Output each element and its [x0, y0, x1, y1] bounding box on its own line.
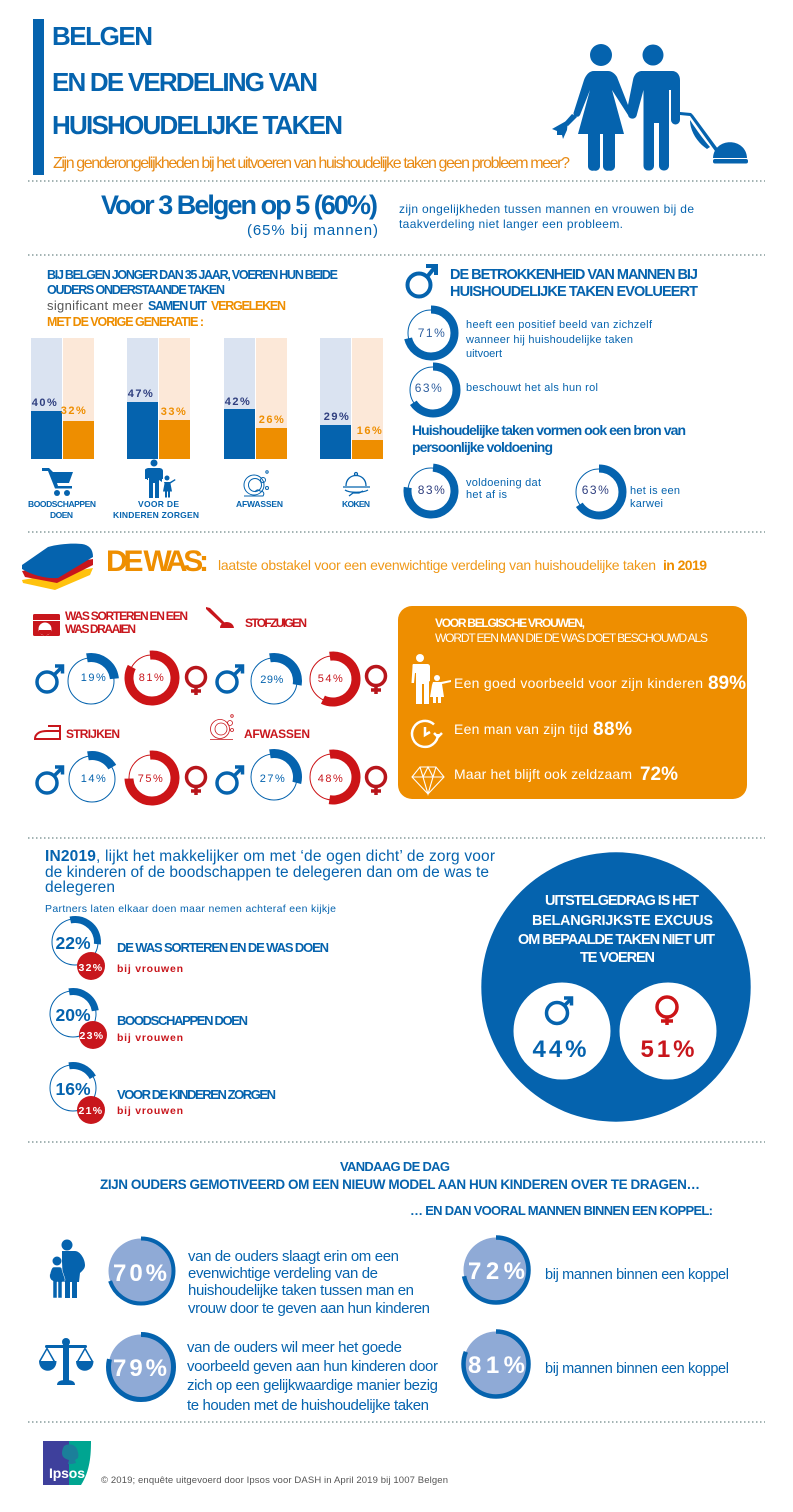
panel heading: WORDT EEN MAN DIE DE WAS DOET BESCHOUWD ALS: [435, 631, 708, 645]
bar labels: AFWASSEN: [236, 499, 283, 509]
stat: zeldzaam: Maar het blijft ook zeldzaam: [454, 766, 632, 782]
heading: vandaag de dag: [100, 1159, 713, 1218]
heading: voldoening: persoonlijke voldoening: [412, 439, 553, 455]
text: karwei: [630, 485, 680, 510]
heading: de was: [106, 545, 707, 578]
label: was sorteren: [65, 609, 188, 636]
stat: man van zijn tijd: [454, 719, 632, 740]
icon: clock: [412, 721, 442, 747]
ring male 19%: [64, 654, 118, 708]
ring 83%: 83%: [418, 483, 446, 497]
text: goede voorbeeld: te houden met de huishoudelijke taken: [187, 1397, 429, 1414]
label: was sorteren: WAS DRAAIEN: [65, 622, 136, 636]
logo: Ipsos: [43, 1441, 91, 1485]
heading: de was: laatste obstakel voor een evenwichtige verdeling van huishoudelijke taken: [218, 557, 656, 573]
donuts: was sorteren: [37, 653, 206, 708]
text: karwei: karwei: [630, 498, 663, 510]
headline: 3 Belgen op 5: [101, 190, 378, 239]
icon: couple with duster and vacuum: [552, 44, 748, 171]
ring: kinderen 16%: 21%: [79, 1105, 103, 1117]
label: stofzuigen: STOFZUIGEN: [245, 616, 307, 630]
bars: boodschappen: [31, 338, 94, 459]
headline explanation: [399, 202, 694, 231]
panel: Belgische vrouwen: [398, 606, 747, 799]
bar labels: DOEN: [50, 510, 73, 520]
bar labels: [28, 499, 370, 520]
bar labels: BOODSCHAPPEN: [28, 499, 96, 509]
panel text: BELANGRIJKSTE EXCUUS: [532, 913, 713, 929]
label: boodschappen: bij vrouwen: [117, 1032, 183, 1044]
ring 72%: 72%: [468, 1258, 525, 1285]
text: mannen koppel 1: bij mannen binnen een koppel: [545, 1267, 729, 1283]
bars: koken: 16%: [357, 425, 383, 437]
headline: 3 Belgen op 5: (65% bij mannen): [247, 222, 378, 239]
logo: Ipsos: Ipsos: [49, 1465, 85, 1481]
title block: EN DE VERDELING VAN: [52, 67, 318, 97]
male icon: [37, 767, 62, 793]
text: positief beeld: heeft een positief beeld van zichzelf: [466, 319, 653, 331]
stat: goed voorbeeld: Een goed voorbeeld voor zijn kinderen: [454, 675, 703, 691]
heading: voldoening: [412, 422, 686, 455]
panel text: [518, 893, 715, 966]
headline: 3 Belgen op 5: Voor 3 Belgen op 5 (60%): [101, 190, 378, 220]
donuts: strijken: [37, 752, 206, 806]
title block: BELGEN: [52, 21, 153, 51]
ring male 29%: 29%: [260, 674, 284, 686]
ring male 27%: 27%: [260, 773, 286, 785]
ring: was doen 22%: 32%: [79, 962, 103, 974]
icon: dishes red: [210, 715, 234, 740]
heading: jonger dan 35 jaar: BIJ BELGEN JONGER DAN 35 JAAR, VOEREN HUN BEIDE: [47, 268, 338, 282]
panel text: OM BEPAALDE TAKEN NIET UIT: [518, 932, 715, 948]
icon: stack of laundry: [22, 544, 93, 590]
headline explanation: zijn ongelijkheden tussen mannen en vrouwen bij de: [399, 202, 694, 216]
heading: de was: in 2019: [663, 557, 707, 573]
text: evenwichtige verdeling: huishoudelijke taken tussen man en: [188, 1282, 414, 1299]
ring male 14%: [65, 752, 119, 806]
female icon: [366, 666, 386, 694]
heading: betrokkenheid: HUISHOUDELIJKE TAKEN EVOLUEERT: [450, 284, 698, 300]
bars: kinderen: [127, 338, 190, 459]
panel heading: [435, 616, 708, 645]
text: evenwichtige verdeling: evenwichtige verdeling van de: [188, 1265, 378, 1282]
icon: iron: [35, 726, 60, 739]
heading: jonger dan 35 jaar: significant meer: [47, 298, 144, 313]
bar labels: KOKEN: [342, 499, 370, 509]
bar labels: KINDEREN ZORGEN: [113, 510, 199, 520]
heading: jonger dan 35 jaar: MET DE VORIGE GENERATIE :: [47, 315, 204, 329]
icon: cloche: [343, 472, 370, 496]
ring female 54%: [307, 653, 359, 705]
heading: betrokkenheid: DE BETROKKENHEID VAN MANNEN BIJ: [450, 267, 698, 283]
footer credit: © 2019; enquête uitgevoerd door Ipsos voor DASH in April 2019 bij 1007 Belgen: [101, 1475, 448, 1486]
stat: zeldzaam: 72%: [640, 764, 678, 785]
label: was doen: bij vrouwen: [117, 963, 183, 975]
stat: goed voorbeeld: [454, 673, 746, 694]
bars: afwassen: 42%: [225, 396, 251, 408]
text: evenwichtige verdeling: [188, 1248, 430, 1317]
male stat 44%: 44%: [532, 1036, 590, 1063]
text: goede voorbeeld: voorbeeld geven aan hun kinderen door: [187, 1358, 438, 1375]
heading: jonger dan 35 jaar: OUDERS ONDERSTAANDE TAKEN: [47, 283, 225, 297]
bar labels: VOOR DE: [138, 499, 179, 509]
ring female 48%: 48%: [318, 773, 344, 785]
label: kinderen: bij vrouwen: [117, 1105, 183, 1117]
ring 72%: [464, 1238, 528, 1302]
bar chart: generations: [31, 338, 383, 459]
text: positief beeld: uitvoert: [466, 348, 502, 360]
male icon: [37, 666, 62, 692]
icon: family: [50, 1240, 85, 1298]
label: was doen: DE WAS SORTEREN EN DE WAS DOEN: [117, 940, 329, 955]
ring female 54%: 54%: [318, 673, 344, 685]
text: in 2019 delegeren: IN2019, lijkt het makkelijker om met ‘de ogen dicht’ de zorg voor: [45, 848, 495, 865]
ring: kinderen 16%: 16%: [55, 1079, 91, 1099]
text: evenwichtige verdeling: van de ouders slaagt erin om een: [188, 1248, 399, 1265]
male stat 44%: [514, 982, 610, 1080]
text: goede voorbeeld: van de ouders wil meer het goede: [187, 1339, 402, 1356]
ring 81%: [464, 1332, 528, 1396]
ring 70%: [108, 1238, 174, 1304]
title block: HUISHOUDELIJKE TAKEN: [52, 110, 343, 140]
ring: boodschappen 20%: 20%: [55, 1005, 91, 1025]
stat: man van zijn tijd: Een man van zijn tijd: [454, 721, 588, 737]
label: afwassen: AFWASSEN: [244, 727, 310, 741]
bars: kinderen: 33%: [161, 406, 187, 418]
heading: vandaag de dag: … EN DAN VOORAL MANNEN BINNEN EEN KOPPEL:: [410, 1203, 713, 1218]
heading: de was: DE WAS:: [106, 545, 209, 578]
icon: vacuum: [206, 607, 234, 628]
text: goede voorbeeld: zich op een gelijkwaardige manier bezig: [187, 1377, 438, 1394]
female icon: [366, 768, 386, 795]
icon: diamond: [412, 767, 444, 794]
bars: boodschappen: 40%: [32, 397, 58, 409]
ring: was doen 22%: 22%: [55, 933, 91, 953]
male icon: [217, 666, 242, 692]
ring: was doen 22%: [48, 915, 105, 980]
text: voldoening: [466, 477, 541, 501]
bars: koken: [320, 338, 383, 459]
text: voldoening: voldoening dat: [466, 477, 541, 489]
ring female 75%: 75%: [138, 773, 164, 785]
female stat 51%: 51%: [640, 1036, 698, 1063]
icon: scales: [39, 1338, 94, 1385]
ring 63% karwei: 63%: [582, 483, 610, 497]
bars: afwassen: [224, 338, 287, 459]
ring 81%: 81%: [468, 1352, 525, 1379]
text: positief beeld: [465, 319, 653, 360]
headline explanation: taakverdeling niet langer een probleem.: [399, 217, 623, 231]
ring male 14%: 14%: [81, 773, 107, 785]
label: boodschappen: BOODSCHAPPEN DOEN: [117, 1013, 248, 1028]
text: goede voorbeeld: [187, 1339, 438, 1414]
ring female 81%: 81%: [139, 672, 165, 684]
icon: dishes: [244, 471, 268, 496]
ring female 81%: [127, 653, 177, 703]
bars: koken: 29%: [324, 411, 350, 423]
heading: betrokkenheid: [450, 267, 698, 300]
female icon: [186, 668, 206, 695]
bars: afwassen: 26%: [259, 414, 285, 426]
panel text: TE VOEREN: [580, 950, 655, 966]
subheading: partners: Partners laten elkaar doen maar nemen achteraf een kijkje: [45, 903, 336, 915]
heading: vandaag de dag: ZIJN OUDERS GEMOTIVEERD OM EEN NIEUW MODEL AAN HUN KINDEREN OVER TE DRAGEN…: [100, 1177, 700, 1192]
ring male 19%: 19%: [81, 672, 107, 684]
label: boodschappen: [117, 1013, 248, 1044]
label: kinderen: VOOR DE KINDEREN ZORGEN: [117, 1087, 276, 1102]
ring 71%: [408, 310, 454, 356]
text: in 2019 delegeren: [45, 848, 495, 896]
ring male 29%: [247, 654, 301, 708]
text: in 2019 delegeren: de kinderen of de boodschappen te delegeren dan om de was te: [45, 864, 489, 881]
text: in 2019 delegeren: delegeren: [45, 879, 115, 896]
ring 71%: 71%: [418, 326, 446, 340]
heading: jonger dan 35 jaar: SAMEN UIT: [148, 299, 207, 313]
ring 70%: 70%: [113, 1260, 167, 1287]
bars: kinderen: 47%: [128, 388, 154, 400]
icon: parent and child white: [412, 654, 451, 704]
male icon: [217, 767, 242, 793]
female stat 51%: [620, 982, 716, 1080]
heading: voldoening: Huishoudelijke taken vormen ook een bron van: [412, 422, 686, 438]
icon: shopping cart: [42, 468, 73, 496]
icon: parent and child: [145, 460, 176, 498]
donuts: afwassen: [217, 750, 386, 804]
label: strijken: STRIJKEN: [66, 727, 120, 741]
title block: [33, 19, 570, 175]
text: mannen koppel 2: bij mannen binnen een koppel: [545, 1361, 729, 1377]
label: was sorteren: WAS SORTEREN EN EEN: [65, 609, 188, 623]
text: positief beeld: wanneer hij huishoudelijke taken: [465, 334, 633, 346]
icon: male symbol: [408, 266, 436, 296]
ring male 27%: [247, 750, 301, 804]
ring 83%: [406, 466, 456, 516]
panel heading: VOOR BELGISCHE VROUWEN,: [435, 616, 585, 630]
heading: jonger dan 35 jaar: [47, 268, 338, 329]
text: karwei: het is een: [630, 485, 680, 497]
ring: boodschappen 20%: 23%: [80, 1030, 104, 1042]
panel: uitstelgedrag circle: [481, 852, 751, 1122]
title block: Zijn genderongelijkheden bij het uitvoeren van huishoudelijke taken geen probleem meer?: [53, 155, 570, 172]
ring 79%: [108, 1334, 174, 1400]
ring female 75%: [127, 753, 177, 803]
icon: washing machine: [33, 614, 60, 636]
ring: kinderen 16%: [47, 1062, 105, 1124]
heading: jonger dan 35 jaar: VERGELEKEN: [211, 299, 286, 313]
female icon: [186, 768, 206, 795]
text: evenwichtige verdeling: vrouw door te geven aan hun kinderen: [188, 1300, 430, 1317]
stat: zeldzaam: [454, 764, 678, 785]
stat: man van zijn tijd: 88%: [593, 719, 632, 740]
ring 63% karwei: [576, 468, 622, 516]
ring 79%: 79%: [113, 1355, 167, 1382]
label: was doen: [117, 940, 329, 975]
panel text: UITSTELGEDRAG IS HET: [545, 893, 699, 909]
ring 63% rol: 63%: [415, 381, 443, 395]
ring 63% rol: [410, 366, 456, 414]
donuts: stofzuigen: [217, 653, 386, 708]
text: voldoening: het af is: [466, 489, 508, 501]
text: rol: beschouwt het als hun rol: [466, 382, 598, 394]
ring: boodschappen 20%: [47, 988, 107, 1049]
label: kinderen: [117, 1087, 276, 1117]
bars: boodschappen: 32%: [61, 405, 87, 417]
stat: goed voorbeeld: 89%: [708, 673, 746, 694]
heading: vandaag de dag: VANDAAG DE DAG: [340, 1159, 450, 1174]
ring female 48%: [307, 751, 359, 803]
